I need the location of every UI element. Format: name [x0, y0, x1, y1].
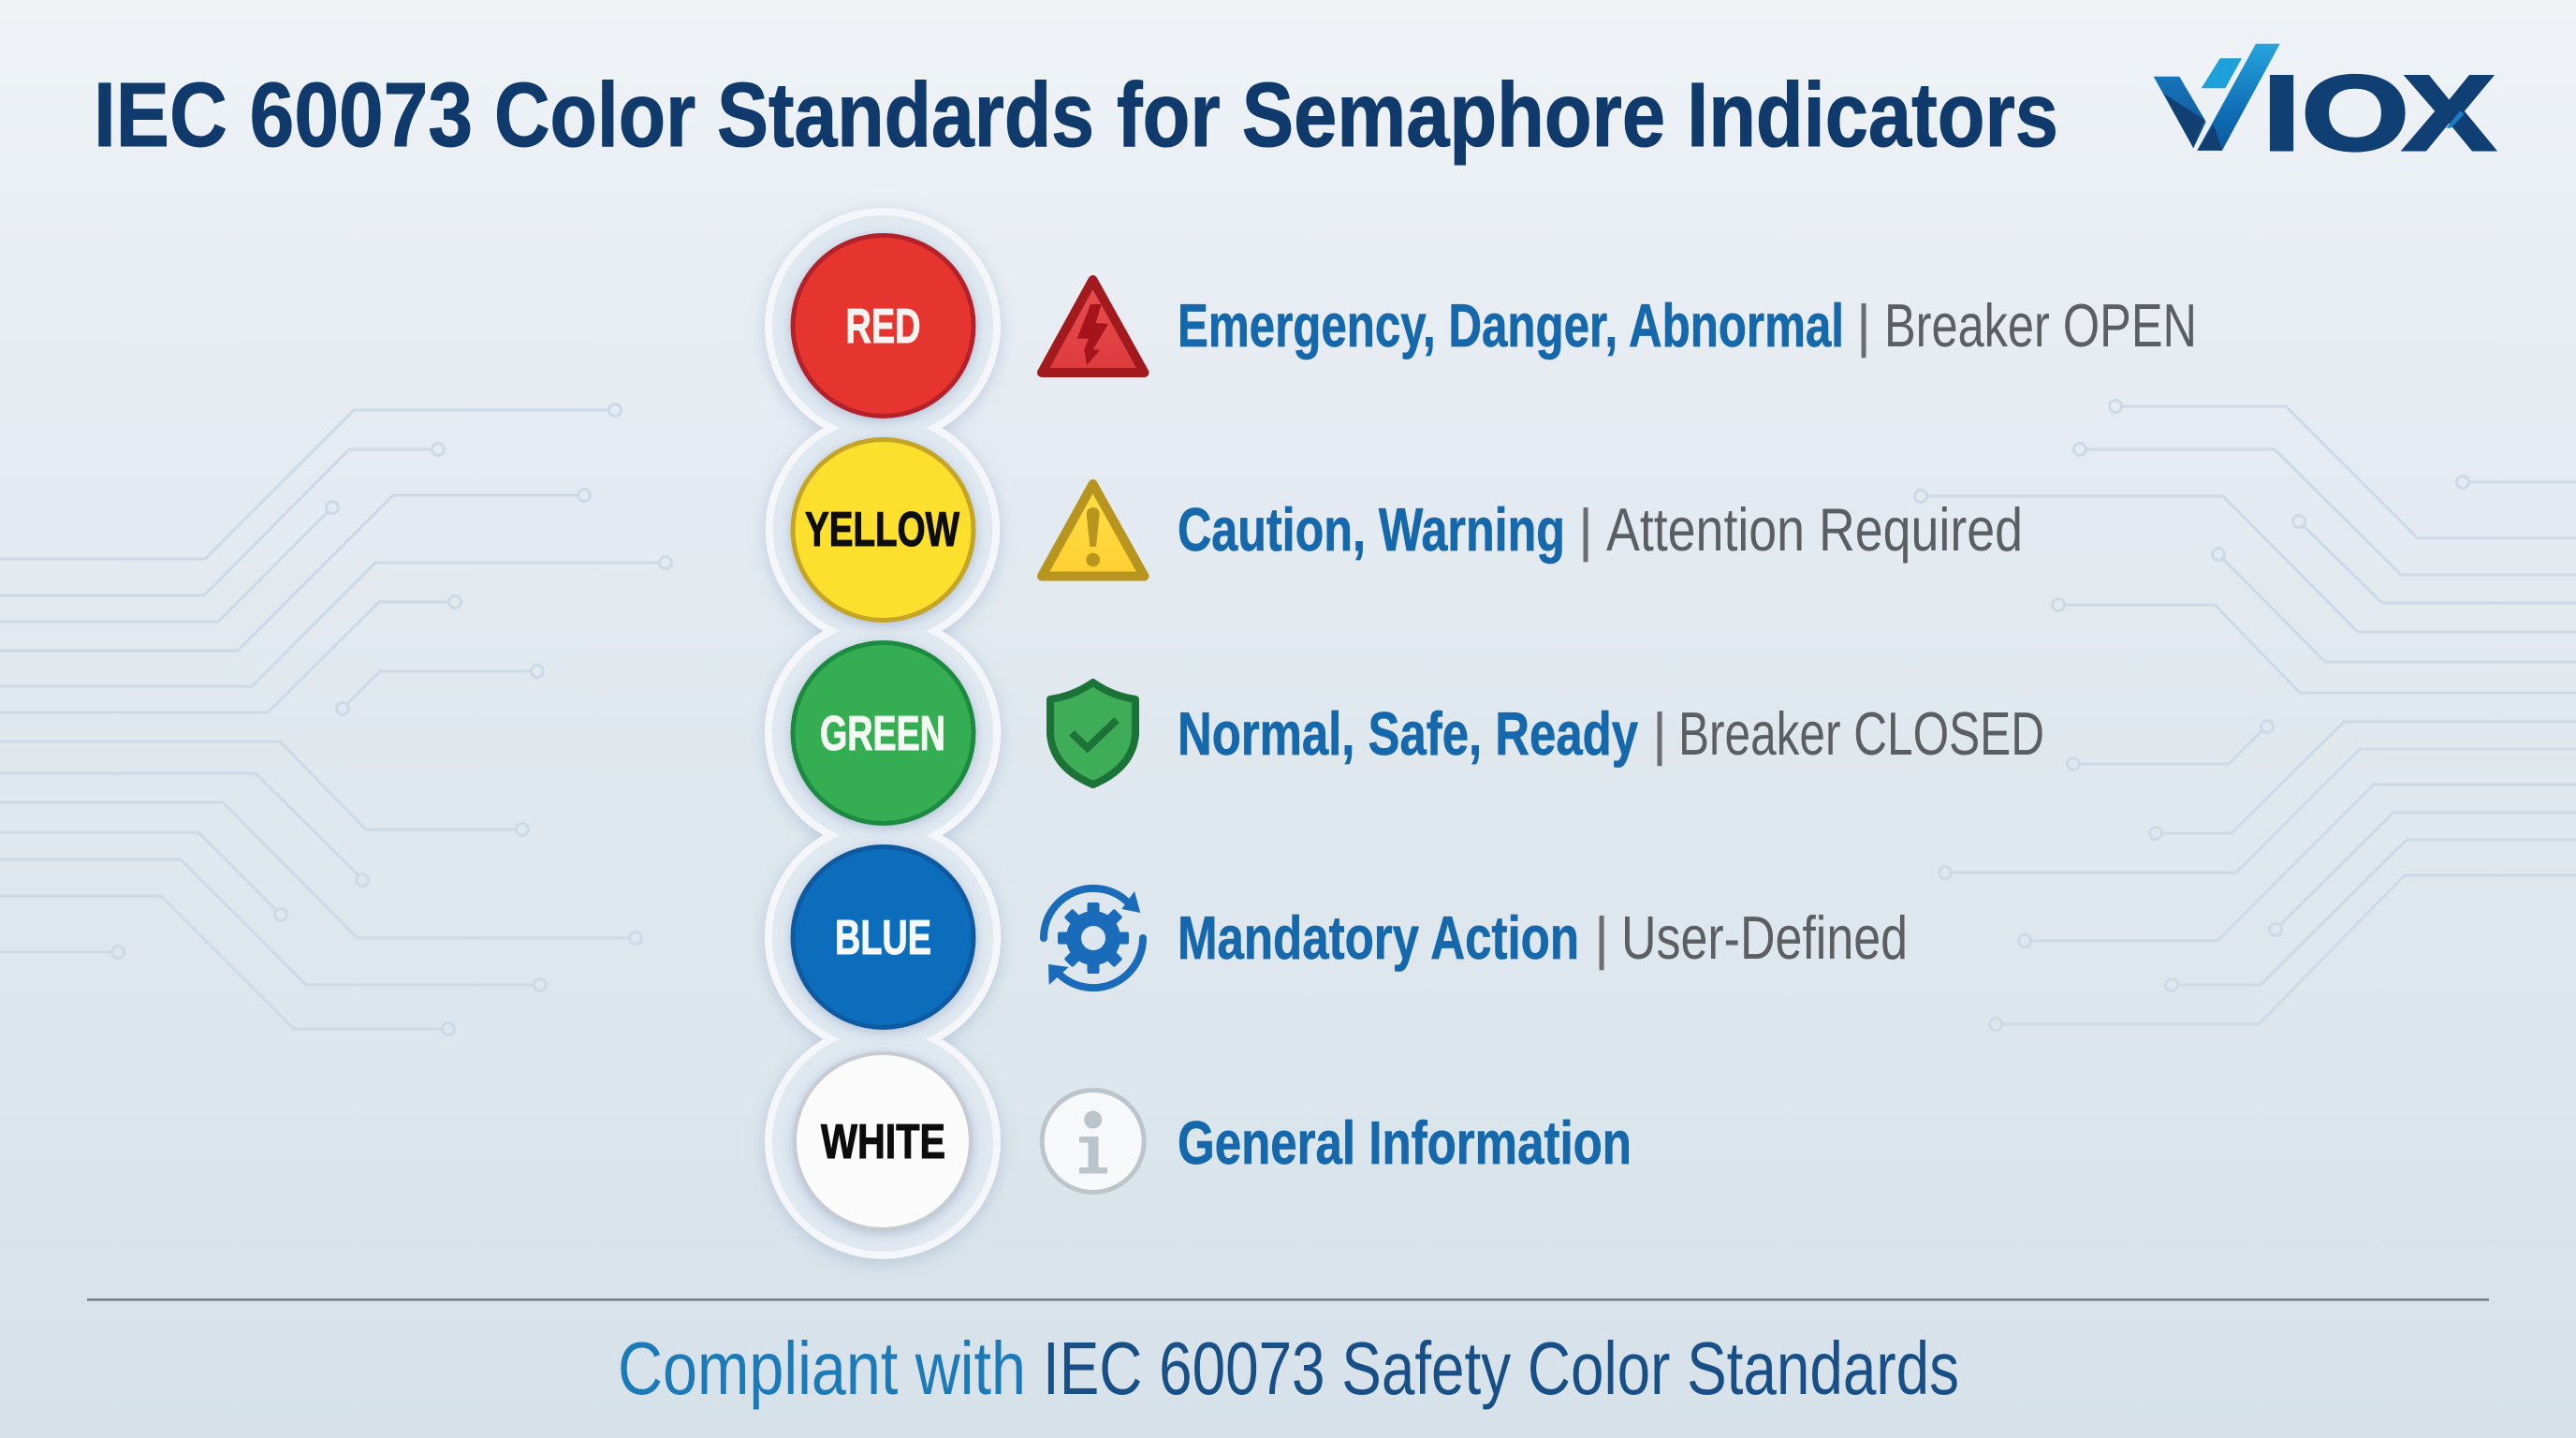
title: for Semaphore Indicators [1117, 64, 2058, 166]
logo wordmark: IOX [2262, 53, 2496, 173]
label: blue meaning: User-Defined [1621, 903, 1908, 972]
blue lamp [793, 846, 973, 1028]
label: yellow meaning: | [1578, 498, 1593, 563]
label: blue meaning: | [1594, 906, 1609, 971]
label: white meaning: General Information [1178, 1108, 1632, 1177]
title: Color Standards [494, 64, 1094, 166]
label: red meaning: Breaker OPEN [1884, 291, 2197, 360]
label: green meaning [1178, 699, 2044, 768]
label: blue meaning: Mandatory Action [1178, 903, 1579, 972]
green lamp: GREEN [820, 707, 945, 761]
label: red meaning: | [1856, 294, 1871, 359]
label: yellow meaning: Caution, Warning [1178, 495, 1565, 564]
icon: danger triangle with lightning [1042, 280, 1144, 373]
label: green meaning: Normal, Safe, Ready [1178, 699, 1638, 768]
row: yellow [793, 440, 2023, 620]
red lamp: RED [846, 300, 921, 354]
row: blue [793, 846, 1908, 1028]
yellow lamp: YELLOW [805, 503, 960, 557]
icon: shield with check [1050, 682, 1135, 785]
white lamp: WHITE [821, 1115, 945, 1169]
title: IEC 60073 [94, 64, 473, 166]
blue lamp: BLUE [835, 911, 931, 965]
label: red meaning: Emergency, Danger, Abnormal [1178, 291, 1844, 360]
logo mark: V with check [2154, 44, 2280, 151]
footer compliance line [618, 1327, 1959, 1410]
row: green [793, 642, 2044, 824]
green lamp [793, 642, 973, 824]
icon: warning triangle [1042, 484, 1144, 577]
white lamp [795, 1053, 971, 1229]
logo: VIOX [2154, 44, 2496, 173]
row: white [795, 1053, 1632, 1229]
logo accent on X [2446, 110, 2465, 128]
footer compliance line: IEC 60073 Safety Color Standards [1043, 1327, 1959, 1410]
footer compliance line: Compliant with [618, 1327, 1026, 1410]
label: yellow meaning: Attention Required [1606, 495, 2023, 564]
icon: gear with rotating arrows [1044, 888, 1143, 988]
circuit traces right [1915, 401, 2576, 1030]
red lamp [793, 236, 973, 416]
semaphore housing outline [768, 212, 997, 1255]
circuit traces left [0, 404, 672, 1035]
label: yellow meaning [1178, 495, 2023, 564]
label: green meaning: Breaker CLOSED [1678, 699, 2044, 768]
label: green meaning: | [1652, 702, 1667, 767]
title [94, 64, 2058, 166]
yellow lamp [793, 440, 973, 620]
icon: information [1042, 1090, 1144, 1193]
row: red [793, 236, 2197, 416]
